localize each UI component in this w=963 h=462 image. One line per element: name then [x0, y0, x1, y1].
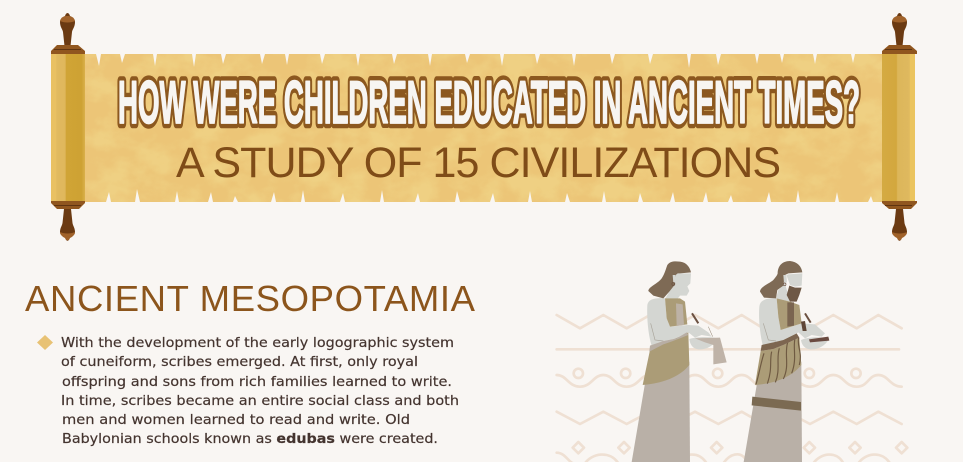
subtitle: A STUDY OF 15 CIVILIZATIONS [176, 139, 781, 187]
body text: men and women learned to read and write. Old [62, 412, 410, 428]
scroll banner [84, 54, 884, 202]
body text: Babylonian schools known as edubas were created. [62, 431, 438, 447]
background pattern and scribes illustration [557, 261, 907, 462]
right scroll roller [882, 13, 917, 241]
left scroll roller [51, 13, 85, 241]
body text: In time, scribes became an entire social class and both [61, 393, 459, 409]
scribe figure: right with beard [744, 261, 829, 462]
heading: Ancient Mesopotamia: ANCIENT MESOPOTAMIA [25, 278, 476, 319]
scribe figure: left [632, 261, 727, 462]
body text: offspring and sons from rich families learned to write. [62, 374, 452, 390]
bullet diamond [37, 335, 53, 350]
body text: of cuneiform, scribes emerged. At first, only royal [61, 354, 418, 370]
body text: With the development of the early logographic system [61, 335, 454, 351]
body text [61, 335, 459, 447]
